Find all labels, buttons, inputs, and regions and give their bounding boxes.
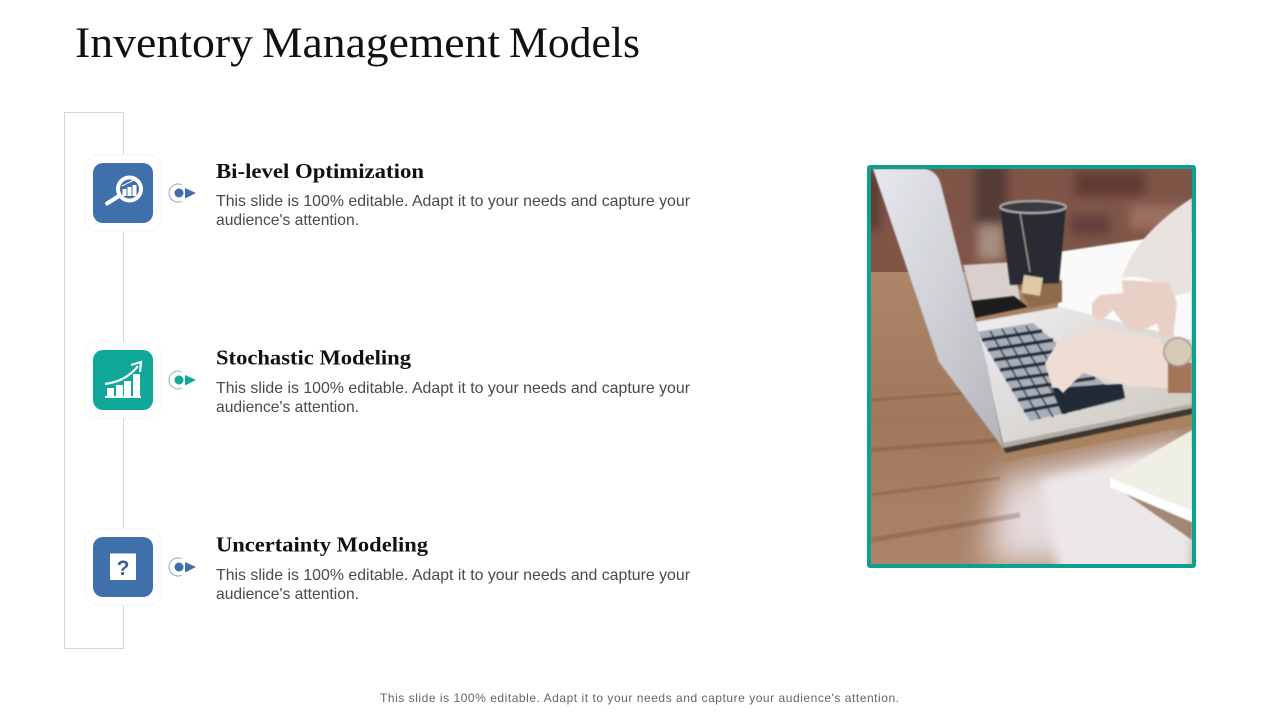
- dark keys under hand: [1052, 384, 1125, 414]
- icon: target arrow: [169, 184, 196, 202]
- photo background: wooden table: [871, 272, 1192, 564]
- item: Uncertainty Modeling: [85, 529, 691, 605]
- title: Models: [509, 20, 640, 67]
- phone: [971, 296, 1028, 318]
- item: Stochastic Modeling: [85, 342, 691, 418]
- icon: growth chart: [85, 342, 161, 418]
- keyboard: [977, 323, 1123, 421]
- sleeve: [1122, 198, 1192, 296]
- item: Bi-level Optimization: [85, 155, 691, 231]
- icon: question mark: ?: [117, 557, 129, 580]
- photo border: [869, 167, 1194, 566]
- description: This slide is 100% editable. Adapt it to your needs and capture your: [216, 567, 691, 584]
- title: Management: [262, 20, 500, 67]
- icon: magnifier with chart: [85, 155, 161, 231]
- description: audience's attention.: [216, 586, 359, 603]
- timeline frame: [64, 112, 124, 648]
- icon: target arrow: [169, 558, 196, 576]
- photo background: brick wall: [871, 169, 1192, 272]
- description: audience's attention.: [216, 399, 359, 416]
- description: audience's attention.: [216, 212, 359, 229]
- table reflections: [963, 232, 1192, 574]
- cup: [1000, 201, 1066, 296]
- description: This slide is 100% editable. Adapt it to your needs and capture your: [216, 193, 691, 210]
- heading: Stochastic Modeling: [216, 346, 412, 370]
- icon: target arrow: [169, 371, 196, 389]
- right hand: [1045, 328, 1175, 393]
- laptop base: [975, 307, 1192, 453]
- notebook: [1110, 430, 1192, 540]
- heading: Uncertainty Modeling: [216, 532, 429, 556]
- footer note: This slide is 100% editable. Adapt it to your needs and capture your audience's attention.: [380, 691, 899, 705]
- title: Inventory: [75, 20, 254, 67]
- left hand: [1092, 280, 1177, 338]
- icon: question mark: [85, 529, 161, 605]
- description: This slide is 100% editable. Adapt it to your needs and capture your: [216, 380, 691, 397]
- photo: hands typing on laptop: [866, 165, 1200, 574]
- laptop lid: [873, 169, 1003, 448]
- heading: Bi-level Optimization: [216, 159, 424, 183]
- watch: [1164, 338, 1192, 393]
